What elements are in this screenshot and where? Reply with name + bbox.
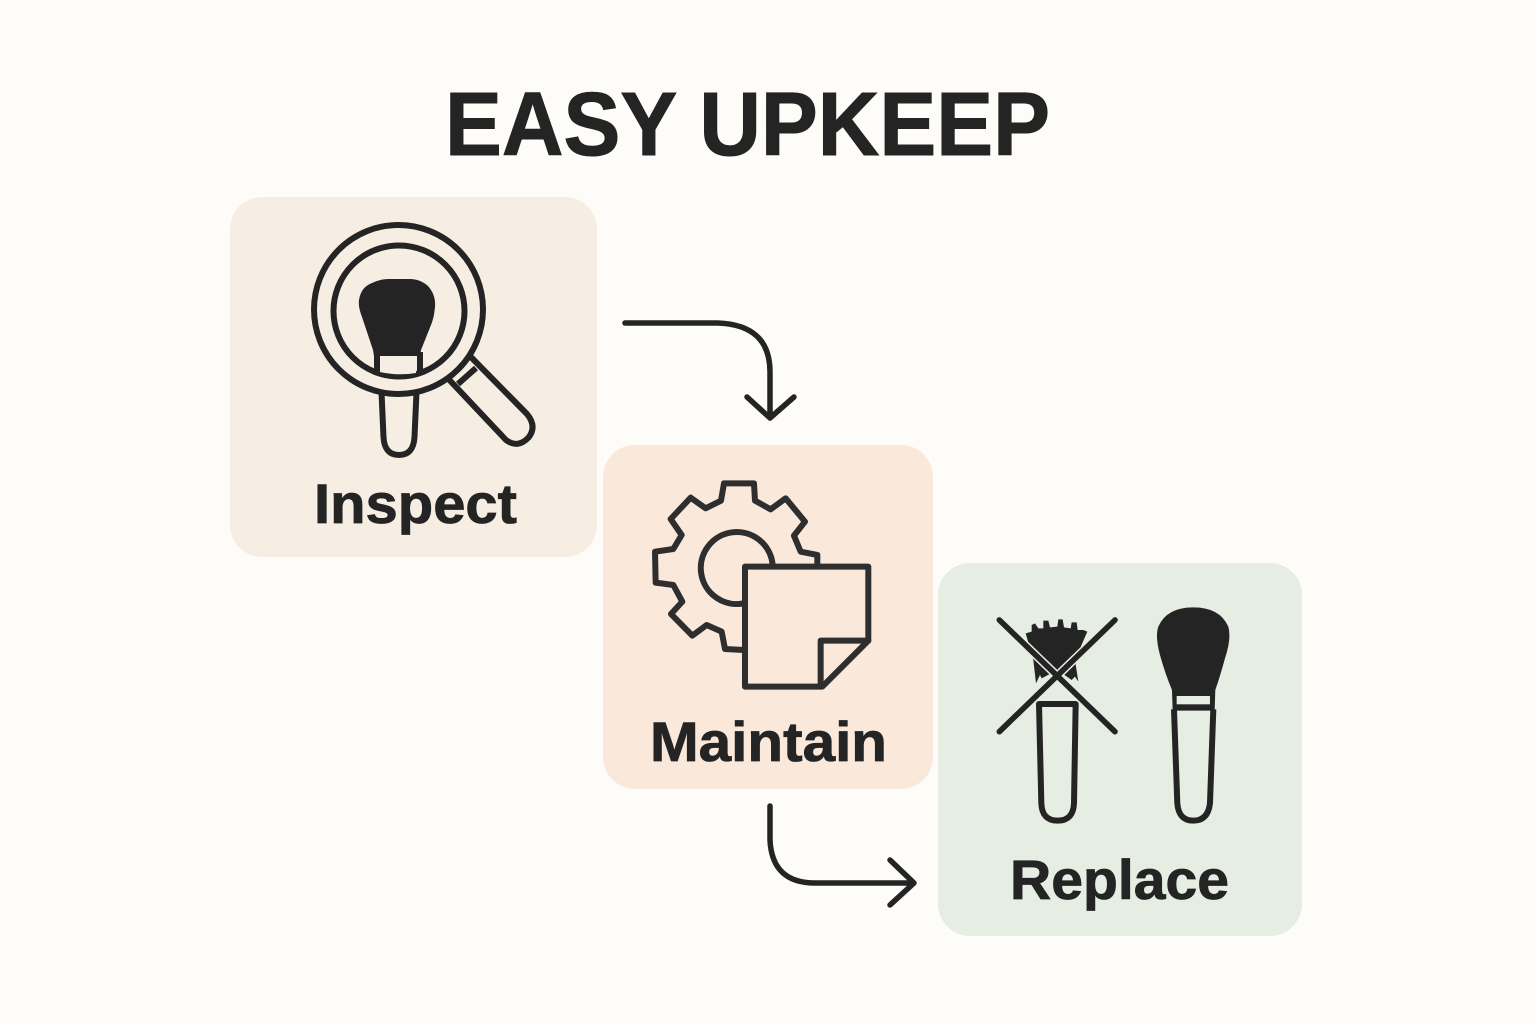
arrow: inspect to maintain xyxy=(625,323,794,418)
panel: inspect xyxy=(230,197,597,557)
label: replace: Replace xyxy=(1010,848,1229,911)
label: inspect: Inspect xyxy=(314,472,517,535)
panel: replace xyxy=(938,563,1302,936)
icon: magnifying glass over brush xyxy=(314,225,533,455)
icon: worn brush crossed out xyxy=(999,619,1115,821)
label: maintain: Maintain xyxy=(650,710,887,773)
arrow: maintain to replace xyxy=(770,806,914,905)
panel: maintain xyxy=(603,445,933,789)
icon: gear and sticky note xyxy=(655,483,868,687)
title: EASY UPKEEP xyxy=(445,75,1050,175)
icon: new brush xyxy=(1157,607,1229,821)
